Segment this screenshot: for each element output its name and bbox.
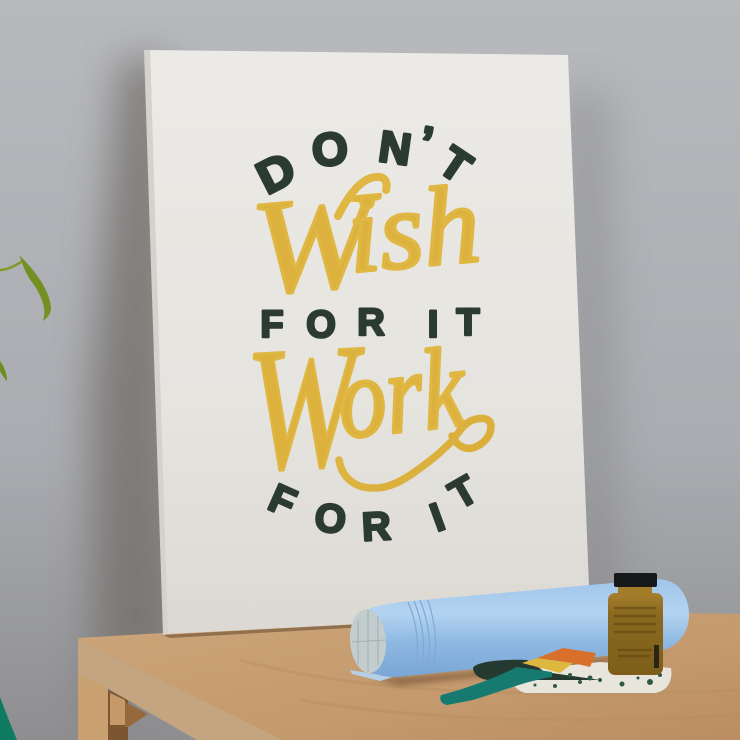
gold flourish under Work — [339, 418, 491, 488]
gold paint jar — [608, 573, 663, 675]
heading: FOR IT — [260, 302, 480, 346]
script word: Work: W — [243, 308, 372, 507]
canvas — [144, 50, 590, 635]
heading: DON'T: N — [376, 122, 414, 175]
table — [78, 611, 740, 740]
table front edge — [78, 638, 283, 740]
heading: FOR IT: I — [428, 304, 438, 346]
script word: Wish — [246, 162, 485, 324]
heading: FOR IT curved: F — [262, 476, 302, 526]
heading: FOR IT curved: O — [313, 496, 348, 543]
canvas shadow on table — [163, 611, 600, 638]
canvas front — [150, 50, 590, 634]
heading: DON'T — [248, 118, 480, 204]
speckled dish — [473, 660, 671, 693]
blue tube — [348, 579, 689, 686]
script word: Work — [243, 308, 473, 507]
heading: FOR IT curved — [262, 468, 485, 550]
W swash — [338, 177, 387, 216]
script word: Wish: W — [246, 164, 391, 324]
heading: FOR IT: R — [357, 302, 385, 344]
heading: FOR IT: F — [260, 304, 284, 346]
heading: FOR IT: T — [456, 302, 480, 344]
canvas side edge — [144, 50, 169, 635]
heading: DON'T: O — [310, 122, 350, 176]
heading: FOR IT curved: T — [442, 468, 485, 518]
heading: FOR IT: O — [306, 304, 336, 346]
script word: Wish: ish — [342, 162, 485, 297]
paint brush — [440, 648, 596, 705]
tube opening — [348, 608, 388, 674]
table leg — [78, 672, 108, 740]
table top surface — [78, 611, 740, 740]
heading: DON'T: ’ — [416, 118, 437, 168]
plant leaves — [0, 255, 51, 381]
heading: DON'T: T — [430, 137, 480, 193]
heading: FOR IT curved: I — [425, 495, 450, 540]
teal object bottom left — [0, 697, 17, 740]
heading: FOR IT curved: R — [361, 504, 392, 550]
script word: Work: ork — [331, 323, 473, 463]
heading: DON'T: D — [248, 141, 304, 204]
jar lid — [614, 573, 657, 587]
